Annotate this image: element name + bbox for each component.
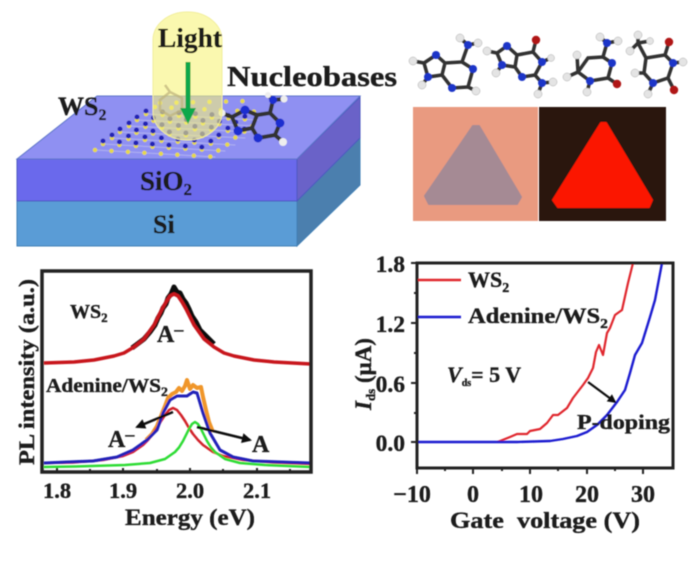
- frame and ticks: [411, 263, 673, 474]
- label: Vds = 5 V: = 5 V: [471, 362, 521, 387]
- diagram: layered substrate with WS2 and light: [17, 12, 397, 246]
- x tick labels: −10: [393, 482, 431, 508]
- PL spectrum chart: [14, 271, 311, 530]
- label: Light: Light: [158, 23, 222, 53]
- blue adenine/WS2 curve: [417, 263, 662, 442]
- y tick labels: 0.6: [376, 372, 405, 398]
- y tick labels: 1.8: [376, 252, 405, 278]
- arrow to A- peak: [137, 412, 173, 427]
- black WS2 noisy data: [132, 287, 214, 348]
- cytosine: [563, 33, 622, 96]
- thymine: [626, 31, 687, 98]
- green A component: [44, 422, 311, 467]
- label: A- upper: –: [173, 319, 184, 339]
- legend: Adenine/WS: [468, 303, 587, 328]
- faint molecule in beam: [160, 85, 182, 116]
- label: A: A: [252, 432, 270, 458]
- x tick labels: 20: [575, 482, 599, 508]
- legend: [418, 267, 608, 332]
- arrow: p-doping shift: [588, 382, 615, 402]
- label: SiO2: SiO: [140, 166, 184, 196]
- Si layer: [17, 138, 360, 246]
- label: WS2: 2: [101, 310, 108, 325]
- label: WS2: WS: [70, 301, 101, 323]
- y tick labels: 1.2: [376, 312, 405, 338]
- top surface: [17, 96, 360, 159]
- x tick labels: [43, 478, 271, 503]
- red A- component: [44, 408, 311, 464]
- x tick labels: 1.9: [109, 478, 137, 503]
- label: Nucleobases: Nucleobases: [227, 61, 397, 93]
- label: Adenine/WS2: 2: [161, 384, 168, 399]
- label: A- upper: A: [157, 322, 174, 348]
- x axis title: Gate voltage (V): [450, 508, 640, 533]
- y axis title: ds: [363, 389, 378, 401]
- red WS2 curve: [497, 263, 633, 442]
- label: Vds = 5 V: V: [447, 362, 464, 387]
- nucleobase molecule on surface: [218, 92, 288, 146]
- label: P-doping: P-doping: [577, 410, 671, 434]
- x tick labels: 10: [519, 482, 543, 508]
- adenine: [409, 34, 482, 95]
- transfer curve chart: [351, 252, 673, 533]
- label: SiO2: 2: [184, 180, 192, 199]
- light beam: [153, 12, 222, 140]
- y tick labels: [376, 252, 405, 457]
- label: A- lower: A: [108, 427, 125, 453]
- x tick labels: 2.1: [243, 478, 271, 503]
- x tick labels: [393, 482, 655, 508]
- optical image of WS2 flake: [413, 107, 538, 221]
- frame and ticks: [42, 271, 311, 472]
- legend: WS: [468, 267, 502, 292]
- x tick labels: 0: [467, 482, 479, 508]
- orange adenine data: [146, 380, 213, 440]
- label: Si: Si: [153, 210, 175, 239]
- y axis title: PL intensity (a.u.): [14, 279, 39, 465]
- legend: 2: [600, 317, 608, 332]
- x axis title: Energy (eV): [125, 505, 255, 530]
- x tick labels: 1.8: [43, 478, 71, 503]
- guanine: [483, 36, 557, 98]
- label: WS2: 2: [98, 107, 106, 124]
- nucleobase molecules row: [409, 31, 687, 98]
- red WS2 fit: [44, 294, 311, 364]
- arrow to A peak: [197, 427, 250, 440]
- photoluminescence image of WS2 flake: [539, 107, 666, 221]
- blue total fit: [44, 392, 311, 463]
- x tick labels: 30: [631, 482, 655, 508]
- x tick labels: 2.0: [176, 478, 204, 503]
- y tick labels: 0.0: [376, 431, 405, 457]
- arrow: light direction: [180, 62, 196, 124]
- legend: 2: [502, 281, 509, 296]
- label: WS2: WS: [58, 92, 98, 121]
- label: Vds = 5 V: ds: [462, 378, 471, 389]
- label: Adenine/WS2: Adenine/WS: [46, 375, 154, 397]
- SiO2 layer: [17, 97, 360, 201]
- WS2 lattice: [95, 101, 262, 157]
- y axis title: (μA): [351, 338, 376, 389]
- label: A- lower: –: [124, 424, 135, 444]
- y axis title: I: [351, 400, 376, 411]
